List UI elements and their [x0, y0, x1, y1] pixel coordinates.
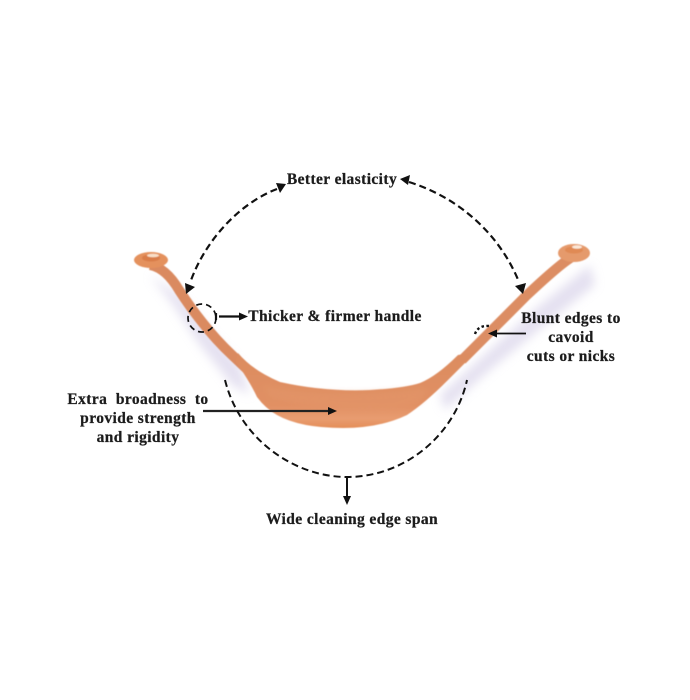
label: blunt edges: cuts or nicks — [527, 348, 615, 365]
dotted arc: blunt edge — [475, 326, 490, 334]
label: blunt edges: cavoid — [548, 329, 594, 346]
blade — [236, 352, 476, 428]
label: thicker handle: Thicker & firmer handle — [248, 308, 422, 325]
label: extra broadness — [67, 391, 209, 446]
arrow: cleaning edge span — [343, 477, 351, 505]
label: extra broadness: Extra broadness to — [67, 391, 209, 408]
blade highlight — [262, 385, 426, 410]
heading: better elasticity: Better elasticity — [287, 171, 397, 188]
dashed arc: right elasticity — [400, 175, 526, 294]
arrow: handle — [216, 312, 248, 320]
dashed arc: left elasticity — [185, 183, 286, 294]
label: blunt edges — [521, 310, 621, 365]
label: cleaning edge span: Wide cleaning edge span — [266, 511, 438, 528]
label: extra broadness: and rigidity — [97, 429, 179, 446]
tongue cleaner — [134, 244, 590, 428]
arrow: broadness — [203, 407, 337, 415]
label: blunt edges: Blunt edges to — [521, 310, 621, 327]
dashed circle: handle — [188, 304, 216, 332]
tongue cleaner shadow — [150, 265, 595, 410]
right handle — [462, 257, 572, 360]
arrow: blunt edge — [488, 330, 526, 338]
left handle — [150, 265, 252, 374]
left loop — [134, 252, 168, 268]
dashed arc: cleaning edge span — [225, 380, 467, 477]
label: extra broadness: provide strength — [80, 410, 196, 427]
right loop — [558, 244, 590, 262]
